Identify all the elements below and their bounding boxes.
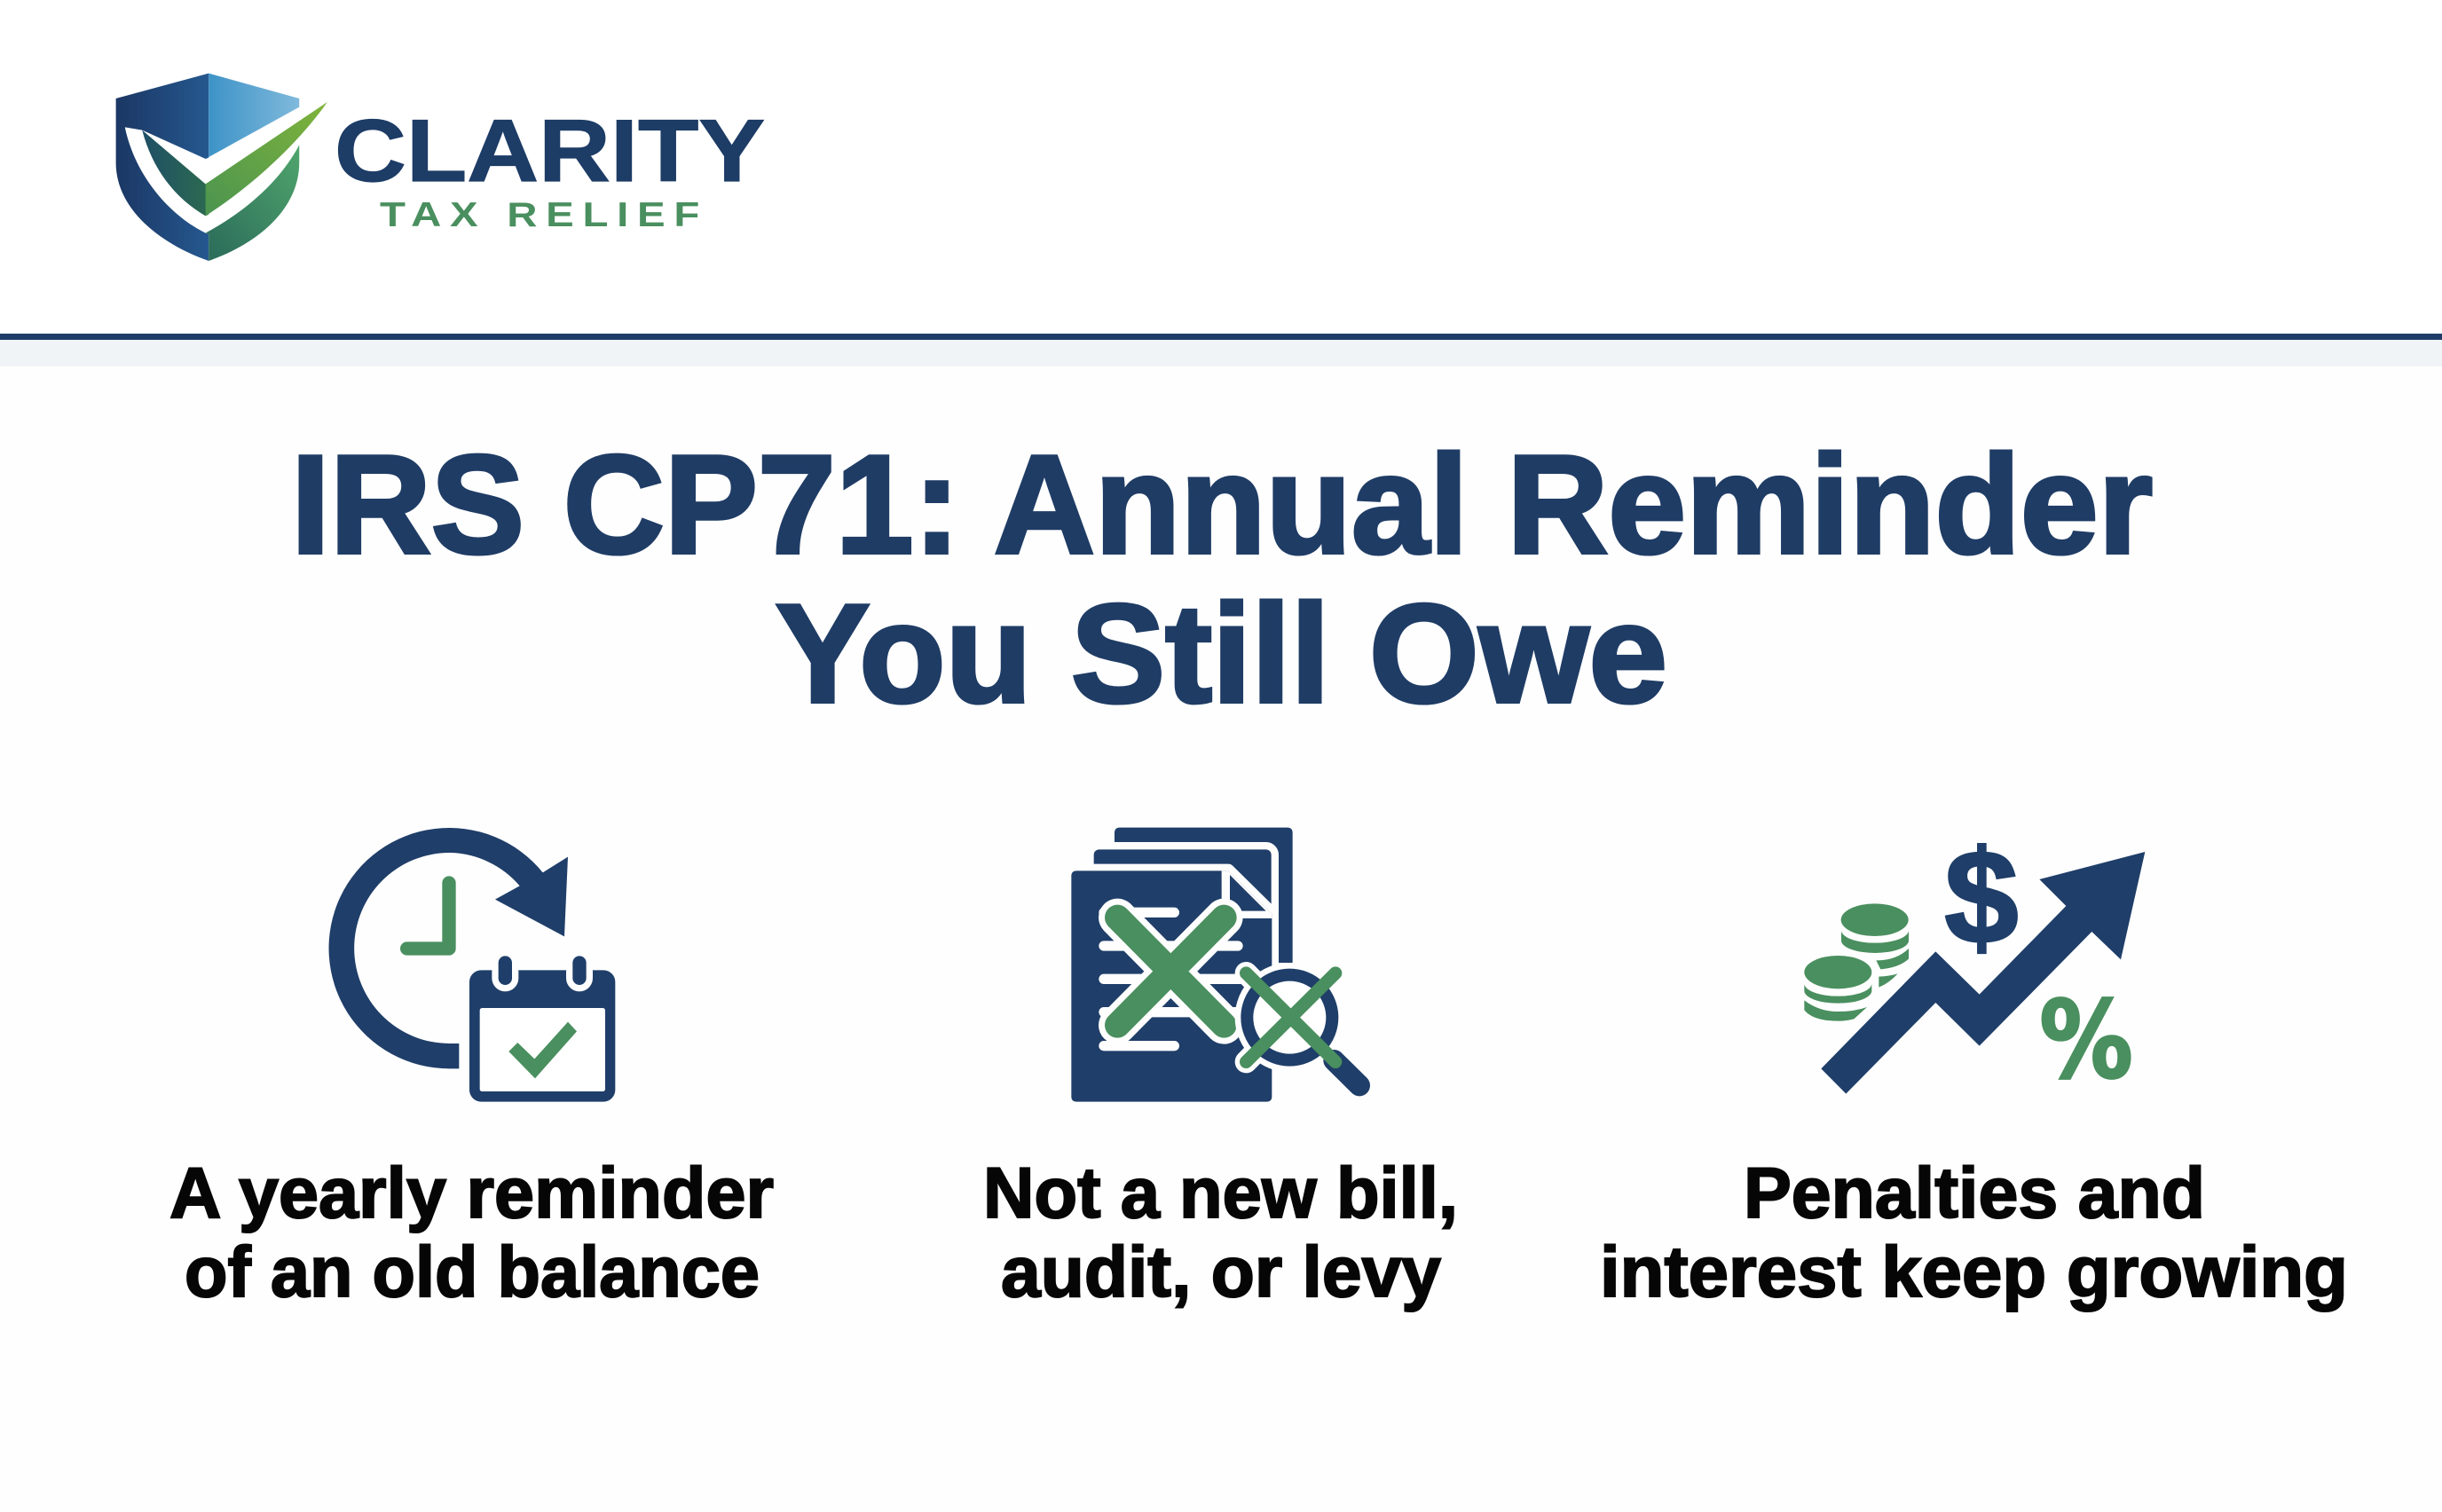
caption: yearly reminder: A yearly reminder (169, 1154, 774, 1233)
title: IRS CP71: Annual Reminder (291, 427, 2153, 583)
caption: yearly reminder: of an old balance (185, 1232, 760, 1312)
logo: Clarity Tax Relief (116, 74, 765, 261)
icon: documents crossed out with magnifier (1071, 828, 1359, 1102)
icon: clock arrow and calendar (329, 828, 615, 1102)
title: You Still Owe (776, 576, 1667, 732)
caption: not a new bill: audit, or levy (1001, 1232, 1441, 1312)
title (291, 427, 2153, 732)
caption: yearly reminder (169, 1154, 774, 1312)
logo wordmark: CLARITY (335, 101, 765, 200)
header rule (0, 334, 2442, 340)
icon: rising arrow with coins, dollar and percent (1804, 823, 2145, 1103)
caption: not a new bill: Not a new bill, (983, 1154, 1458, 1233)
icon: rising arrow with coins, dollar and percent: % (2039, 980, 2133, 1103)
caption: penalties and interest: Penalties and (1744, 1154, 2205, 1233)
icon: rising arrow with coins, dollar and percent: $ (1944, 823, 2019, 972)
icon: shield with check (116, 74, 327, 261)
logo tagline: TAX RELIEF (380, 196, 708, 234)
caption: penalties and interest: interest keep growing (1600, 1232, 2348, 1312)
caption: penalties and interest (1600, 1154, 2348, 1312)
caption: not a new bill (983, 1154, 1458, 1312)
